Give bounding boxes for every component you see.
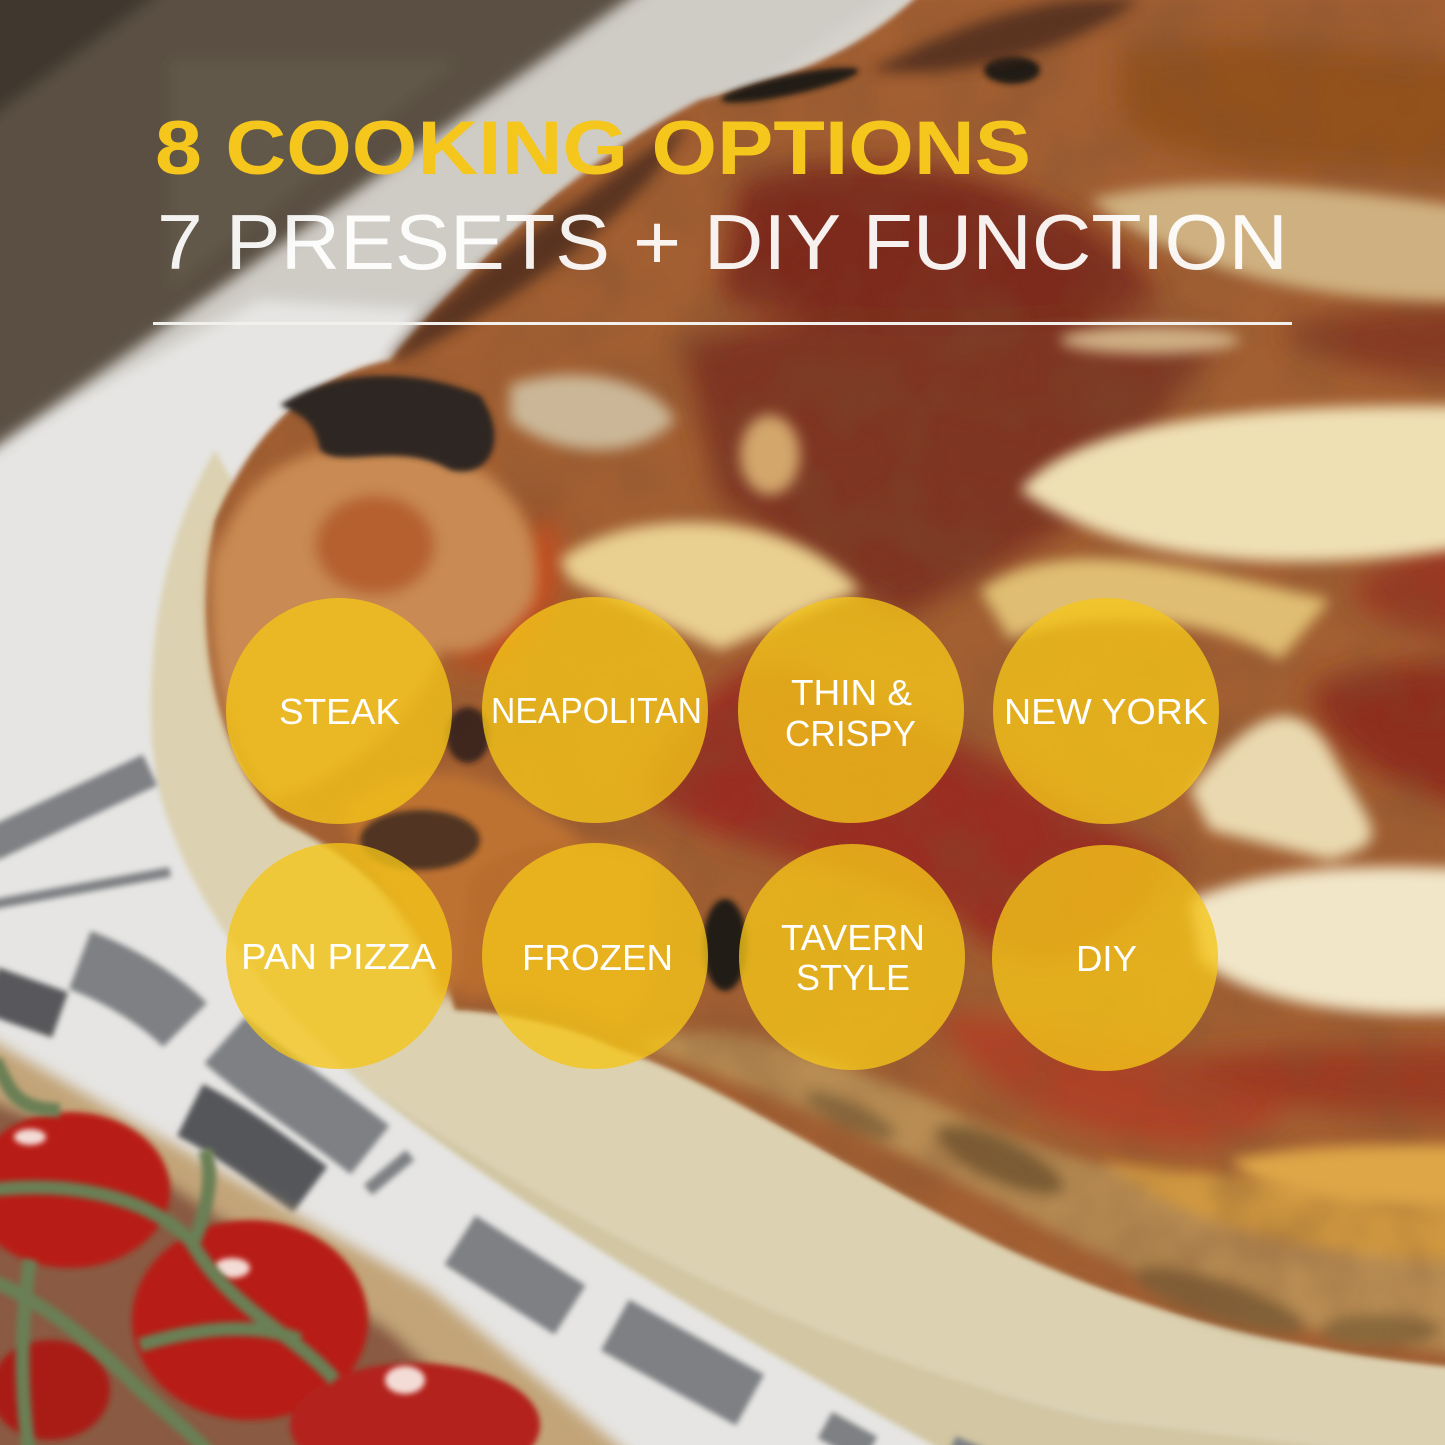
wood backdrop xyxy=(0,0,740,500)
preset circle: thin and crispy: CRISPY xyxy=(785,713,916,754)
charred spots xyxy=(280,56,1040,991)
preset circle: steak xyxy=(226,598,452,824)
tomatoes xyxy=(0,1060,540,1445)
title xyxy=(155,106,1288,286)
preset circle: tavern style: STYLE xyxy=(796,957,910,998)
mottled texture over pizza xyxy=(214,3,1436,1298)
preset circle: tavern style: TAVERN xyxy=(781,917,925,958)
baking stone xyxy=(151,450,1445,1445)
preset circle: frozen xyxy=(482,843,708,1069)
preset circle: diy xyxy=(992,845,1218,1071)
preset circle: neapolitan xyxy=(482,597,708,823)
crust left bulge xyxy=(210,446,660,1030)
preset circle: thin and crispy xyxy=(738,597,964,823)
preset circle: diy: DIY xyxy=(1076,938,1137,979)
sauce and pepperoni xyxy=(450,42,1445,1144)
preset circle: new york: NEW YORK xyxy=(1004,691,1208,732)
tomato vines xyxy=(0,1060,335,1445)
preset circle: pan pizza: PAN PIZZA xyxy=(241,936,436,977)
preset circle: thin and crispy: THIN & xyxy=(791,672,912,713)
crust bottom edge xyxy=(630,1032,1445,1365)
preset circle: new york xyxy=(993,598,1219,824)
tomato tray xyxy=(0,1010,660,1445)
counter: white surface xyxy=(0,0,970,840)
melted cheese xyxy=(510,184,1445,1206)
towel with stripes xyxy=(0,750,1030,1445)
preset circle: pan pizza xyxy=(226,843,452,1069)
heading: 8 cooking options: 8 COOKING OPTIONS xyxy=(155,106,1031,191)
preset circle: tavern style xyxy=(739,844,965,1070)
preset circle: steak: STEAK xyxy=(279,691,400,732)
preset circle: neapolitan: NEAPOLITAN xyxy=(491,690,702,731)
preset circle: frozen: FROZEN xyxy=(522,937,673,978)
subheading: 7 presets + DIY function: 7 PRESETS + DIY FUNCTION xyxy=(157,198,1288,286)
